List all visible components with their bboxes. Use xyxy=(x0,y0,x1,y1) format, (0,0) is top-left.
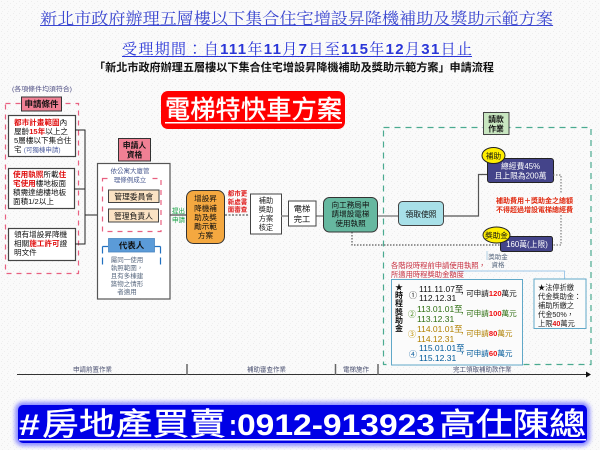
arrow: submit application: 提出 xyxy=(172,206,185,215)
heading: applicant qualification: 申請人 xyxy=(123,140,146,150)
badge: completion bonus: 獎助金 xyxy=(485,230,508,240)
step: subsidy plan approval xyxy=(250,194,282,234)
panel: statutory in-lieu bonus: 補助所繳之 xyxy=(538,301,574,310)
vertical heading: schedule bonus: 時 xyxy=(395,290,403,300)
panel: statutory in-lieu bonus: ★法停折繳 xyxy=(538,283,574,292)
condition 2: 面積1/2以上 xyxy=(13,196,54,206)
vertical heading: schedule bonus: 助 xyxy=(395,315,403,325)
heading: claim process: 作業 xyxy=(488,124,504,134)
representative note: 築物之情形 xyxy=(111,279,144,288)
timeline labels: 補助審查作業 xyxy=(247,364,286,374)
heading: claim process xyxy=(484,112,509,134)
tier 2: ② xyxy=(408,310,416,319)
schedule note: 各階段時程前申請使用執照， xyxy=(391,261,486,270)
panel: statutory in-lieu bonus: 代金50%， xyxy=(538,310,574,319)
step: subsidy plan approval: 獎助 xyxy=(259,205,273,214)
panel: schedule bonus xyxy=(392,280,522,365)
timeline labels: 完工領取補助款作業 xyxy=(453,364,512,374)
step: subsidy plan approval: 核定 xyxy=(259,223,273,232)
bonus qualification label xyxy=(487,251,508,269)
representative note: 且有多棟建 xyxy=(111,271,144,280)
connector: total cap bracket xyxy=(552,175,561,245)
badge: subsidy: 補助 xyxy=(486,150,501,160)
panel: statutory in-lieu bonus: 代金獎助金： xyxy=(538,292,581,301)
step: lift completed xyxy=(288,201,316,226)
connector: to completion bonus xyxy=(352,232,500,245)
note: all conditions required: (各項條件均須符合) xyxy=(12,84,72,93)
total cap note: 不得超過增設電梯總經費 xyxy=(496,205,573,214)
step: subsidy plan approval: 補助 xyxy=(259,196,273,205)
representative note: 屬同一使用 xyxy=(111,255,143,264)
condominium act note: 依公寓大廈管 xyxy=(110,166,150,175)
tier 4: ④ xyxy=(409,350,417,359)
timeline labels xyxy=(73,364,512,374)
heading: applicant qualification: 資格 xyxy=(127,150,142,160)
step: apply for use permit: 向工務局申 xyxy=(332,200,369,210)
arrow: submit application: 申請 xyxy=(172,215,186,224)
condition 1: 宅 (可獨棟申請) xyxy=(14,144,61,154)
condition 1: 5層樓以下集合住 xyxy=(14,135,72,145)
tier 1: 112.12.31 xyxy=(419,293,456,303)
vertical heading: schedule bonus xyxy=(395,283,403,333)
tier 3: ，可申請80萬元 xyxy=(458,328,513,338)
schedule note: 所適用時程獎助金額度 xyxy=(391,270,465,279)
condition 1: 都市計畫範圍內 xyxy=(14,117,67,127)
timeline labels: 電梯施作 xyxy=(343,364,370,374)
condition 1 xyxy=(8,116,76,156)
tier 4 xyxy=(409,343,513,363)
heading: application conditions: 申請條件 xyxy=(24,99,59,109)
tier 1: ，可申請120萬元 xyxy=(458,288,517,298)
panel: statutory in-lieu bonus: 上限40萬元 xyxy=(538,319,575,328)
total cap note xyxy=(496,194,573,214)
step: lift subsidy application: 增設昇 xyxy=(194,193,217,203)
condominium act note xyxy=(110,166,150,184)
condition 2 xyxy=(8,168,74,208)
tier 2: ，可申請100萬元 xyxy=(458,308,517,318)
connector: permit to subsidy xyxy=(443,174,487,216)
bonus qualification label: 資格 xyxy=(492,260,505,269)
step: obtain permit: 領取使照 xyxy=(405,209,437,219)
panel: applicant qualification xyxy=(98,138,170,299)
step: apply for use permit: 使用執照 xyxy=(335,218,366,228)
subsidy box: 總經費45% xyxy=(501,161,540,171)
vertical heading: schedule bonus: ★ xyxy=(395,283,403,292)
step: lift subsidy application: 方案 xyxy=(198,230,213,240)
condition 3 xyxy=(8,228,76,260)
condition 2: 使用執照所載住 xyxy=(13,169,67,179)
connector: conditions to applicant xyxy=(74,130,97,244)
tier 1: 111.11.07至 xyxy=(419,284,464,294)
connectors between steps xyxy=(281,215,398,217)
panel: statutory in-lieu bonus xyxy=(534,279,586,328)
tier 2 xyxy=(408,304,517,324)
heading: applicant qualification xyxy=(118,138,150,161)
step: lift subsidy application xyxy=(186,190,224,244)
contact banner: 0912-913923 xyxy=(237,409,435,442)
arrow: urban renewal office review xyxy=(225,188,249,215)
panel: application conditions xyxy=(6,97,78,274)
step: lift subsidy application: 助及獎 xyxy=(194,212,217,222)
representative note xyxy=(111,255,144,296)
representative xyxy=(108,238,154,252)
condominium act note: 理條例成立 xyxy=(114,175,147,184)
condition 3: 明文件 xyxy=(14,247,37,257)
vertical heading: schedule bonus: 程 xyxy=(395,298,403,308)
express lift banner: 電梯特快車方案 xyxy=(165,96,342,124)
tier 4: 115.12.31 xyxy=(419,353,456,363)
tier 3 xyxy=(408,324,513,344)
vertical heading: schedule bonus: 獎 xyxy=(395,307,403,317)
tier 4: 115.01.01至 xyxy=(419,343,465,353)
tier 3: 114.12.31 xyxy=(417,334,454,344)
subsidy box: 且上限為200萬 xyxy=(494,170,547,180)
vertical heading: schedule bonus: 金 xyxy=(395,323,403,333)
tier 3: 114.01.01至 xyxy=(417,324,463,334)
contact banner: # xyxy=(19,409,40,442)
condition 2: 積需達總樓地板 xyxy=(13,187,67,197)
arrow: urban renewal office review: 面審查 xyxy=(228,204,248,214)
process subtitle: 「新北市政府辦理五層樓以下集合住宅增設昇降機補助及獎助示範方案」申請流程 xyxy=(94,60,494,74)
completion bonus box: 160萬(上限) xyxy=(506,239,548,249)
arrow: urban renewal office review: 都市更 xyxy=(228,188,248,198)
total cap note: 補助費用＋獎助金之總額 xyxy=(496,196,573,205)
step: lift subsidy application: 勵示範 xyxy=(194,221,217,231)
step: lift completed: 完工 xyxy=(294,214,310,224)
contact banner xyxy=(15,402,590,446)
title: 新北市政府辦理五層樓以下集合住宅增設昇降機補助及獎助示範方案 xyxy=(40,10,553,28)
heading: application conditions xyxy=(22,97,62,111)
manager xyxy=(108,209,158,222)
contact banner: 房地產買賣 xyxy=(42,407,226,442)
schedule note xyxy=(391,261,486,279)
timeline labels: 申請前置作業 xyxy=(73,364,112,374)
timeline axis xyxy=(17,364,591,378)
tier 4: ，可申請60萬元 xyxy=(458,348,513,358)
arrow: submit application xyxy=(170,206,186,224)
step: apply for use permit xyxy=(324,198,378,232)
arrow: urban renewal office review: 新處書 xyxy=(228,197,248,206)
step: lift completed: 電梯 xyxy=(294,204,310,214)
contact banner: 高仕陳總 xyxy=(439,407,586,442)
condition 2: 宅使用樓地板面 xyxy=(13,178,67,188)
representative: 代表人 xyxy=(119,241,145,251)
step: obtain permit xyxy=(398,202,444,226)
completion bonus box xyxy=(483,227,552,252)
representative note: 執照範圍， xyxy=(111,263,143,272)
condition 3: 領有增設昇降機 xyxy=(14,229,68,239)
bonus qualification label: 獎助金 xyxy=(488,252,508,261)
step: apply for use permit: 請增設電梯 xyxy=(332,208,370,218)
step: subsidy plan approval: 方案 xyxy=(259,214,273,223)
heading: claim process: 請款 xyxy=(488,114,504,124)
tier 1: ① xyxy=(409,291,417,300)
tier 3: ③ xyxy=(408,330,416,339)
tier 2: 113.12.31 xyxy=(417,314,454,324)
management committee xyxy=(108,190,159,202)
tier 2: 113.01.01至 xyxy=(417,304,463,314)
subsidy box xyxy=(482,148,554,182)
condition 3: 相關施工許可證 xyxy=(14,238,68,248)
tier 1 xyxy=(409,284,517,303)
step: lift subsidy application: 降機補 xyxy=(194,203,217,213)
application period: 受理期間：自111年11月7日至115年12月31日止 xyxy=(122,40,472,58)
contact banner: : xyxy=(229,409,237,442)
manager: 管理負責人 xyxy=(114,211,153,221)
condition 1: 屋齡15年以上之 xyxy=(14,126,68,136)
panel: claim process xyxy=(384,112,591,364)
representative note: 者適用 xyxy=(117,287,137,296)
management committee: 管理委員會 xyxy=(114,192,153,202)
